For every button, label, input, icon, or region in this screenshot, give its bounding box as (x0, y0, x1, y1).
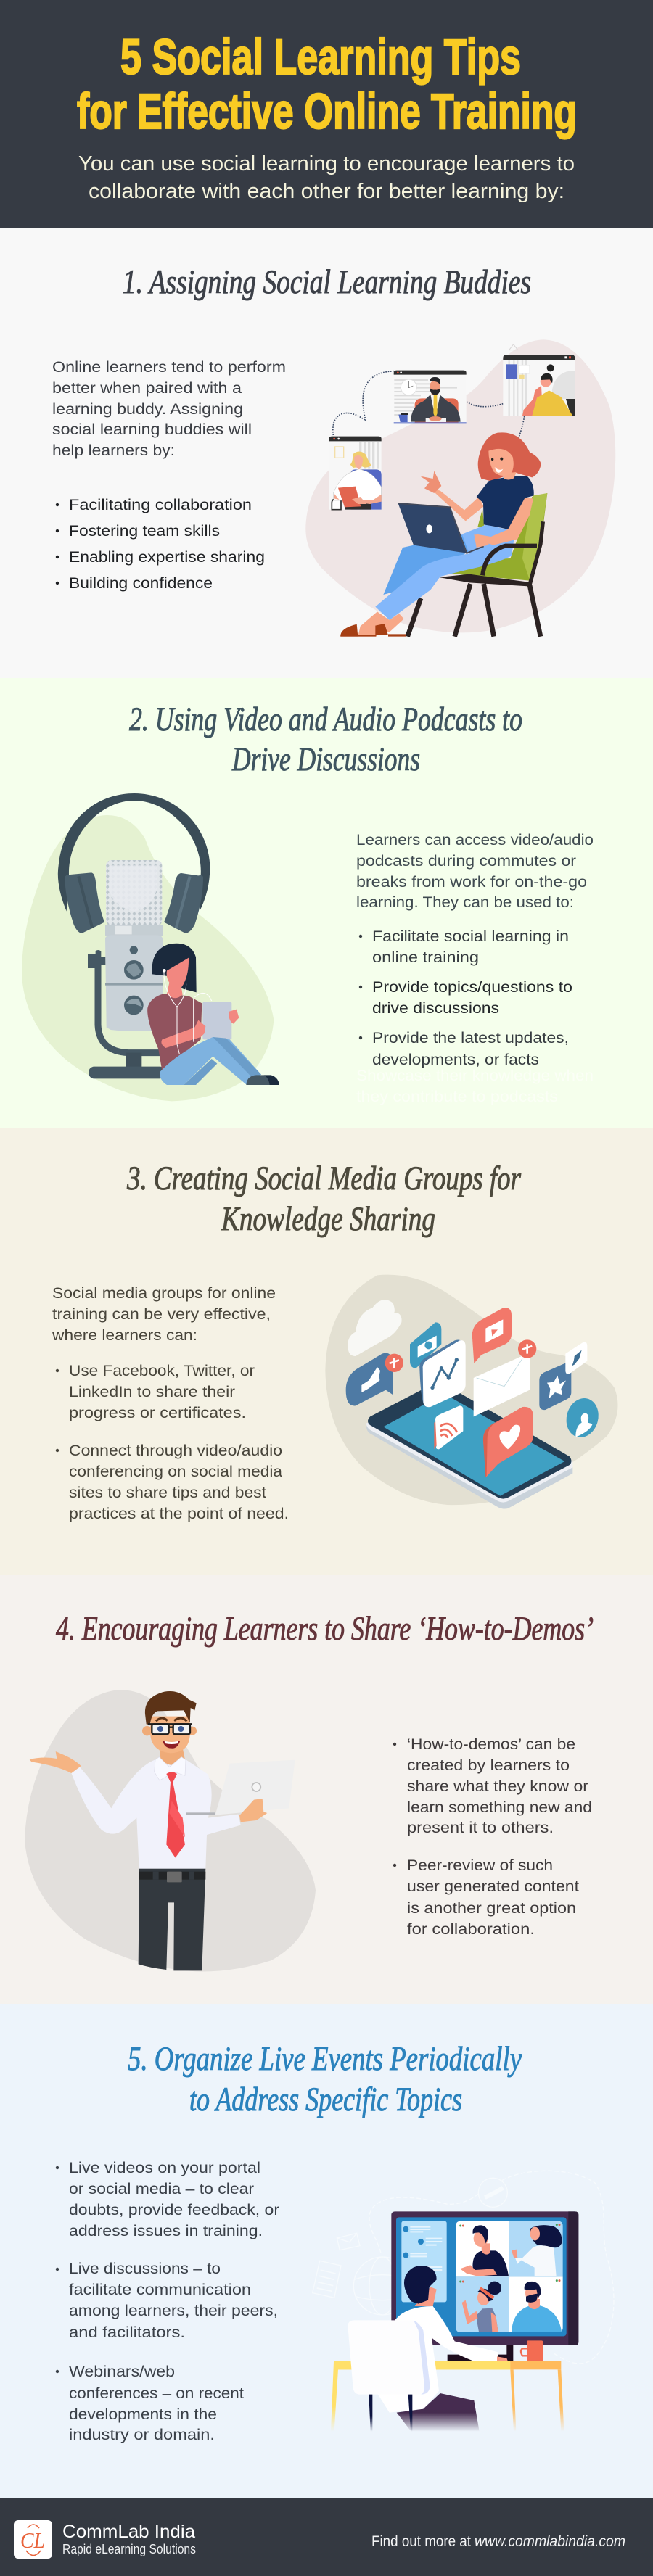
heading: tip 3 (126, 1160, 522, 1238)
heading: tip 5: 5. Organize Live Events Periodically (128, 2040, 522, 2078)
icon: mug (521, 2340, 543, 2361)
icon: thumbs up bubble (346, 1353, 403, 1405)
bullet list: tip 4: user generated content (407, 1878, 579, 1895)
bullet list: tip 4: created by learners to (407, 1757, 570, 1774)
brand name (62, 2522, 196, 2556)
bullet list: tip 2: developments, or facts (372, 1052, 539, 1068)
bullet list: tip 3: sites to share tips and best (69, 1485, 266, 1501)
icon: envelope (474, 1339, 536, 1416)
bullet list: tip 5: Live discussions – to (69, 2261, 221, 2277)
bullet list: tip 4: present it to others. (407, 1820, 554, 1836)
text block: tip 3 intro: where learners can: (52, 1327, 197, 1344)
panel: footer (0, 2498, 653, 2576)
bullet list: tip 5: among learners, their peers, (69, 2303, 278, 2319)
text block: tip 2 intro: learning. They can be used to: (356, 894, 574, 911)
heading: tip 1: 1. Assigning Social Learning Buddies (123, 263, 531, 301)
video participant 3 (462, 2282, 501, 2332)
icon: monitor (391, 2211, 578, 2362)
panel: tip 5 live events (0, 2004, 653, 2498)
bullet list: tip 5 (56, 2160, 279, 2443)
bullet list: tip 2: drive discussions (372, 1000, 499, 1017)
subtitle: You can use social learning to encourage learners to (78, 152, 575, 176)
icon: video bubble (472, 1308, 512, 1363)
bullet list: tip 5: conferences – on recent (69, 2385, 244, 2402)
bullet list: tip 3 (56, 1363, 289, 1522)
brand name: CommLab India (62, 2522, 195, 2542)
icon: star tile (539, 1363, 571, 1410)
icon: heart bubble (483, 1407, 533, 1477)
icon: video window left (329, 437, 382, 510)
text block: tip 3 intro: training can be very effective, (52, 1306, 271, 1323)
faint hidden text: they contribute to podcasts (356, 1089, 558, 1105)
illustration: microphone with headphones and listener (22, 793, 279, 1101)
heading: tip 5 (128, 2040, 522, 2118)
bullet list: tip 3: conferencing on social media (69, 1464, 282, 1480)
icon: video window right (503, 355, 575, 416)
icon: cloud (348, 1300, 402, 1356)
background line icons (313, 2171, 614, 2364)
icon: laptop (186, 1760, 295, 1822)
subtitle: collaborate with each other for better learning by: (89, 180, 564, 203)
text block: tip 1 intro: learning buddy. Assigning (52, 401, 243, 418)
icon: video window middle (394, 371, 467, 423)
bullet list: tip 3: Use Facebook, Twitter, or (69, 1363, 255, 1379)
heading: tip 2: 2. Using Video and Audio Podcasts to (129, 701, 522, 738)
woman listening with tablet (147, 944, 279, 1085)
bullet list: tip 4: ‘How-to-demos’ can be (407, 1736, 575, 1753)
icon: chart tile (419, 1339, 466, 1407)
person seen from behind (348, 2266, 508, 2432)
icon: profile circle (562, 1395, 603, 1441)
bullet list: tip 3: Connect through video/audio (69, 1442, 282, 1459)
illustration: woman on video calls (305, 339, 615, 637)
heading: tip 3: 3. Creating Social Media Groups for (126, 1160, 522, 1197)
bullet list: tip 3: LinkedIn to share their (69, 1384, 235, 1400)
bullet list: tip 3: progress or certificates. (69, 1405, 246, 1421)
bullet list: tip 4: is another great option (407, 1900, 576, 1917)
bullet list: tip 4: learn something new and (407, 1799, 592, 1816)
text block: tip 1 intro: help learners by: (52, 442, 175, 459)
brand name: Rapid eLearning Solutions (62, 2542, 196, 2556)
bullet list: tip 5: facilitate communication (69, 2282, 251, 2298)
faint hidden text (356, 1068, 594, 1105)
bullet list: tip 1: Enabling expertise sharing (69, 549, 265, 566)
bullet list: tip 2: Facilitate social learning in (372, 928, 569, 945)
bullet list: tip 4: Peer-review of such (407, 1857, 553, 1874)
bullet list: tip 2: Provide topics/questions to (372, 979, 572, 996)
bullet list: tip 5: address issues in training. (69, 2223, 263, 2239)
panel: tip 4 how-to demos (0, 1575, 653, 2004)
man figure (30, 1691, 241, 1970)
bullet list: tip 3: practices at the point of need. (69, 1506, 289, 1522)
text block: tip 2 intro (356, 832, 594, 911)
video participant 4 (512, 2282, 562, 2332)
text block: tip 2 intro: podcasts during commutes or (356, 853, 576, 870)
bullet list: tip 1: Building confidence (69, 575, 213, 592)
bullet list: tip 1: Facilitating collaboration (69, 497, 252, 513)
bullet list: tip 4: for collaboration. (407, 1921, 535, 1938)
heading: tip 3: Knowledge Sharing (221, 1200, 435, 1238)
woman with laptop on chair (340, 432, 547, 637)
bullet list: tip 4 (393, 1736, 592, 1938)
text block: tip 2 intro: breaks from work for on-the-go (356, 874, 587, 891)
bullet list: tip 2: online training (372, 949, 479, 966)
heading: tip 2 (129, 701, 522, 778)
icon: logo (14, 2520, 52, 2559)
bullet list: tip 2 (359, 928, 572, 1068)
website call to action: Find out more at (371, 2533, 471, 2550)
website call to action: www.commlabindia.com (475, 2533, 625, 2550)
website call to action (371, 2533, 625, 2550)
text block: tip 1 intro (52, 359, 286, 459)
bullet list: tip 5: industry or domain. (69, 2427, 215, 2443)
icon: headphones (58, 793, 210, 933)
illustration: phone with social media icons (325, 1275, 618, 1509)
bullet list: tip 1: Fostering team skills (69, 523, 220, 540)
icon: logo: CL (20, 2527, 45, 2553)
panel: tip 2 podcasts (0, 678, 653, 1128)
subtitle (78, 152, 575, 203)
title (77, 29, 577, 139)
bullet list: tip 1 (56, 497, 265, 592)
bullet list: tip 5: Live videos on your portal (69, 2160, 260, 2176)
bullet list: tip 5: doubts, provide feedback, or (69, 2202, 279, 2218)
icon: desk (331, 2361, 564, 2432)
icon: smartphone (366, 1383, 572, 1509)
illustration: person on video conference (313, 2171, 614, 2432)
bullet list: tip 4: share what they know or (407, 1778, 588, 1795)
title: 5 Social Learning Tips (120, 29, 521, 85)
bullet list: tip 5: and facilitators. (69, 2324, 185, 2341)
bullet list: tip 5: developments in the (69, 2406, 217, 2423)
faint hidden text: Showcase their knowledge when (356, 1068, 594, 1084)
panel: tip 1 buddies (0, 228, 653, 678)
text block: tip 3 intro (52, 1285, 276, 1344)
bullet list: tip 2: Provide the latest updates, (372, 1030, 569, 1046)
heading: tip 5: to Address Specific Topics (189, 2081, 462, 2118)
bullet list: tip 5: or social media – to clear (69, 2181, 254, 2197)
panel: tip 3 social media groups (0, 1128, 653, 1575)
video participant 1 (460, 2225, 509, 2276)
text block: tip 3 intro: Social media groups for online (52, 1285, 276, 1302)
text block: tip 2 intro: Learners can access video/audio (356, 832, 594, 849)
panel: header (0, 0, 653, 228)
icon: bird tile (565, 1342, 587, 1374)
icon: rss tile (434, 1405, 463, 1449)
heading: tip 2: Drive Discussions (231, 740, 420, 778)
bullet list: tip 5: Webinars/web (69, 2364, 175, 2380)
icon: camera tile (410, 1322, 441, 1368)
illustration: man holding laptop (25, 1690, 316, 1971)
video participant 2 (512, 2225, 562, 2276)
icon: microphone (88, 860, 165, 1078)
text block: tip 1 intro: Online learners tend to perform (52, 359, 286, 376)
text block: tip 1 intro: social learning buddies will (52, 421, 252, 438)
text block: tip 1 intro: better when paired with a (52, 380, 242, 397)
